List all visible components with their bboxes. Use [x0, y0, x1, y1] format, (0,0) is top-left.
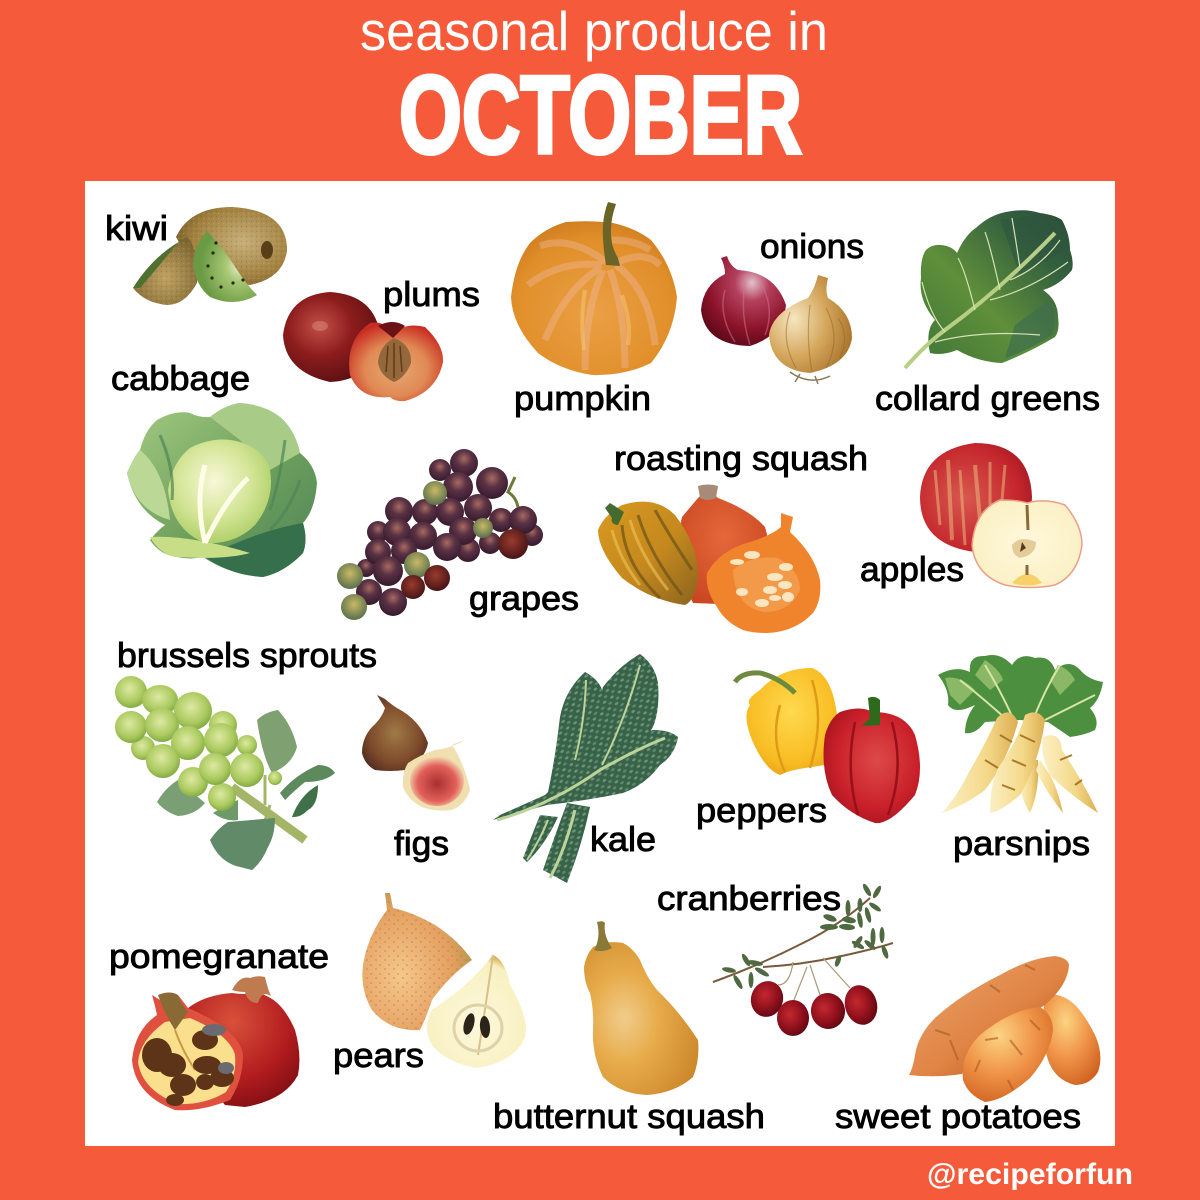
label: collard greens: collard greens [875, 380, 1100, 418]
item: roasting squash [598, 440, 868, 633]
item: grapes [337, 449, 579, 620]
icon: cranberries [713, 883, 893, 1036]
item: kiwi [105, 207, 287, 305]
item: peppers [696, 668, 920, 830]
label: kale: kale [590, 821, 656, 859]
label: roasting squash: roasting squash [614, 440, 868, 478]
label: cabbage: cabbage [111, 360, 250, 398]
item: cabbage [111, 360, 317, 577]
label: figs: figs [394, 825, 449, 863]
item: apples [860, 443, 1082, 589]
item: pears [333, 893, 526, 1075]
icon: kale [493, 654, 678, 883]
icon: sweet potatoes [909, 956, 1100, 1102]
icon: cabbage [127, 403, 317, 577]
label: pears: pears [333, 1037, 424, 1075]
item: pomegranate [109, 938, 329, 1110]
title: seasonal produce in: seasonal produce in [360, 0, 828, 62]
label: apples: apples [860, 551, 964, 589]
icon: butternut squash [584, 921, 698, 1095]
icon: roasting squash [598, 484, 820, 633]
item: figs [362, 695, 470, 863]
item: butternut squash [493, 921, 765, 1136]
panel: produce chart [85, 181, 1115, 1146]
icon: figs [362, 695, 470, 811]
label: cranberries: cranberries [657, 880, 841, 918]
icon: pears [362, 893, 526, 1068]
icon: brussels sprouts [115, 676, 335, 870]
label: parsnips: parsnips [953, 825, 1090, 863]
item: sweet potatoes [835, 956, 1100, 1136]
credit handle: @recipeforfun [927, 1158, 1133, 1191]
label: peppers: peppers [696, 792, 827, 830]
item: kale [493, 654, 678, 883]
item: plums [283, 276, 480, 401]
icon: pomegranate [132, 976, 299, 1110]
icon: collard greens [905, 210, 1073, 368]
icon: apples [920, 443, 1082, 588]
icon: onions [701, 256, 852, 384]
item: brussels sprouts [115, 637, 377, 870]
label: grapes: grapes [469, 580, 579, 618]
item: collard greens [875, 210, 1100, 418]
label: sweet potatoes: sweet potatoes [835, 1098, 1081, 1136]
label: pomegranate: pomegranate [109, 938, 329, 976]
item: onions [701, 228, 864, 384]
title: OCTOBER: OCTOBER [399, 54, 802, 177]
label: butternut squash: butternut squash [493, 1098, 765, 1136]
item: parsnips [938, 655, 1103, 863]
item: pumpkin [511, 202, 677, 418]
icon: plums [283, 292, 443, 401]
label: brussels sprouts: brussels sprouts [117, 637, 377, 675]
label: onions: onions [760, 228, 864, 266]
icon: grapes [337, 449, 543, 620]
icon: kiwi [133, 207, 287, 305]
label: pumpkin: pumpkin [514, 380, 651, 418]
label: plums: plums [383, 276, 480, 314]
icon: pumpkin [511, 202, 677, 375]
item: cranberries [657, 880, 893, 1036]
icon: parsnips [938, 655, 1103, 813]
icon: peppers [735, 668, 920, 823]
label: kiwi: kiwi [105, 210, 168, 248]
